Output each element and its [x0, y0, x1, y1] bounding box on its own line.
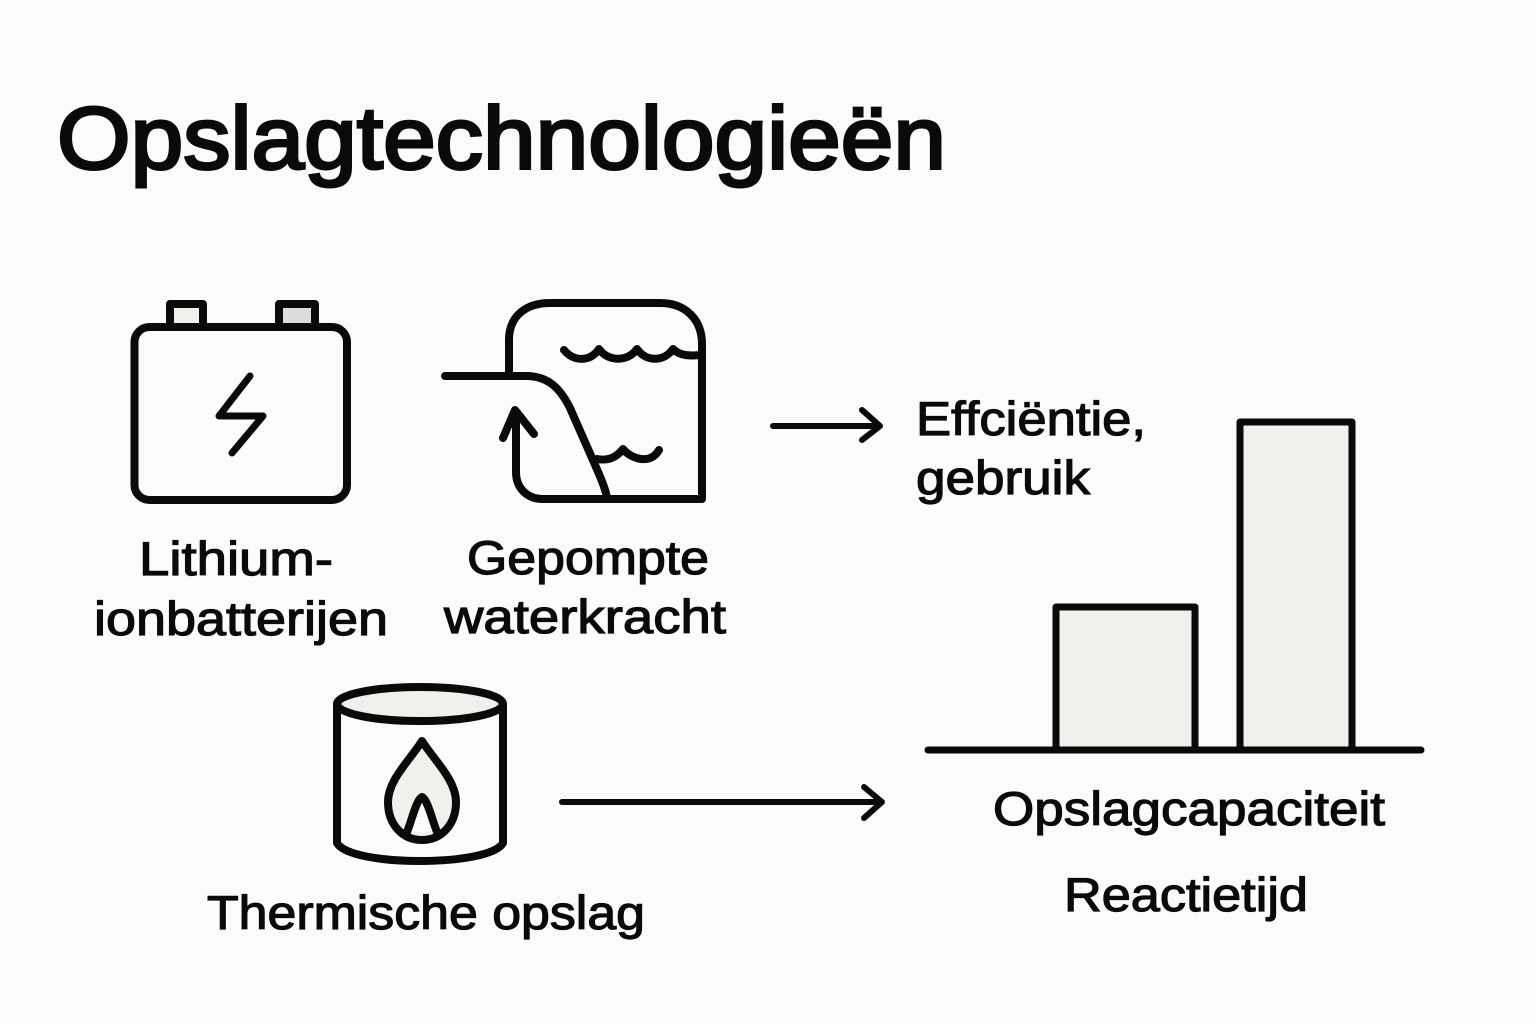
arrow: to efficiency: [773, 410, 880, 440]
label: lithium-ion batteries: [94, 532, 388, 645]
label: storage capacity: Opslagcapaciteit: [993, 782, 1385, 835]
label: lithium-ion batteries: Lithium-: [139, 532, 333, 585]
title: Opslagtechnologieën: [57, 88, 946, 188]
label: lithium-ion batteries: ionbatterijen: [94, 592, 388, 645]
label: response time: Reactietijd: [1064, 868, 1308, 921]
label: thermal storage: Thermische opslag: [207, 886, 645, 939]
icon: pumped hydro: [445, 303, 702, 499]
bar chart: [928, 422, 1421, 750]
label: efficiency, use: Effciëntie,: [916, 392, 1146, 445]
icon: battery: [134, 304, 347, 500]
label: efficiency, use: gebruik: [916, 451, 1091, 504]
label: efficiency, use: [916, 392, 1146, 504]
arrow: to chart: [562, 787, 882, 818]
icon: thermal storage tank: [337, 687, 503, 861]
label: pumped hydropower: Gepompte: [467, 531, 709, 584]
label: pumped hydropower: waterkracht: [443, 590, 726, 643]
label: pumped hydropower: [443, 531, 726, 643]
